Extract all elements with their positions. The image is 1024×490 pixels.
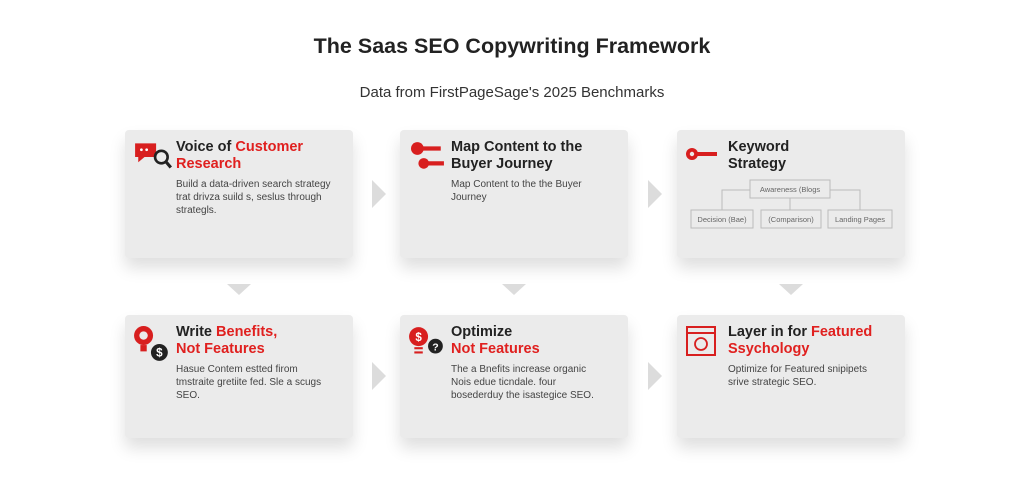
arrow xyxy=(372,180,386,208)
text xyxy=(451,364,594,401)
heading xyxy=(176,139,303,172)
arrow xyxy=(372,362,386,390)
text: Optimize for Featured snipipets xyxy=(728,364,867,375)
diagram xyxy=(690,180,892,228)
text: Hasue Contem estted firom xyxy=(176,364,298,375)
heading: Strategy xyxy=(728,156,786,172)
arrow xyxy=(648,362,662,390)
heading xyxy=(728,139,789,172)
text: Nois edue ticndale. four xyxy=(451,377,556,388)
arrow: down 3 xyxy=(779,284,803,295)
text: SEO. xyxy=(176,390,200,401)
panel: voice of customer research xyxy=(125,130,353,258)
text: The a Bnefits increase organic xyxy=(451,364,586,375)
heading xyxy=(451,139,582,172)
icon: bulb dollar xyxy=(134,326,168,361)
heading xyxy=(451,324,540,356)
diagram: (Comparison) xyxy=(768,215,814,224)
subtitle: Data from FirstPageSage's 2025 Benchmarks xyxy=(360,84,664,101)
icon: bulb question: $ xyxy=(415,331,422,344)
icon: keys xyxy=(411,142,444,169)
heading: Research xyxy=(176,156,241,172)
text: strategls. xyxy=(176,205,217,216)
text: srive strategic SEO. xyxy=(728,377,816,388)
heading xyxy=(728,324,872,356)
icon: bulb question xyxy=(409,327,443,354)
arrow: down 1 xyxy=(227,284,251,295)
diagram: Decision (Bae) xyxy=(697,215,747,224)
heading: Layer in for Featured xyxy=(728,324,872,340)
text: trat drivza suild s, seslus through xyxy=(176,192,322,203)
heading: Map Content to the xyxy=(451,139,582,155)
arrow: down 2 xyxy=(502,284,526,295)
diagram: Landing Pages xyxy=(835,215,885,224)
text: Journey xyxy=(451,192,487,203)
text: Build a data-driven search strategy xyxy=(176,179,331,190)
text xyxy=(176,364,321,401)
panel: layer in xyxy=(677,315,905,438)
heading xyxy=(176,324,277,356)
heading: Keyword xyxy=(728,139,789,155)
heading: Not Features xyxy=(176,340,265,356)
icon: bulb question: ? xyxy=(432,341,439,353)
icon: bulb dollar: $ xyxy=(156,347,163,360)
text: Map Content to the the Buyer xyxy=(451,179,582,190)
text xyxy=(176,179,331,216)
heading: Buyer Journey xyxy=(451,156,553,172)
heading: Not Features xyxy=(451,340,540,356)
title: The Saas SEO Copywriting Framework xyxy=(314,34,710,58)
panel: optimize xyxy=(400,315,628,438)
diagram: Awareness (Blogs xyxy=(760,185,820,194)
icon: chat search xyxy=(135,143,172,168)
text: bosederduy the isastegice SEO. xyxy=(451,390,594,401)
heading: Optimize xyxy=(451,324,512,340)
heading: Voice of Customer xyxy=(176,139,303,155)
panel: map content xyxy=(400,130,628,258)
text xyxy=(728,364,867,388)
heading: Write Benefits, xyxy=(176,324,277,340)
heading: Ssychology xyxy=(728,340,809,356)
text xyxy=(451,179,582,203)
icon: browser brain xyxy=(686,326,716,356)
icon: key xyxy=(686,148,717,160)
panel: keyword strategy xyxy=(677,130,905,258)
arrow xyxy=(648,180,662,208)
panel: write benefits xyxy=(125,315,353,438)
text: tmstraite gretiite fed. Sle a scugs xyxy=(176,377,321,388)
